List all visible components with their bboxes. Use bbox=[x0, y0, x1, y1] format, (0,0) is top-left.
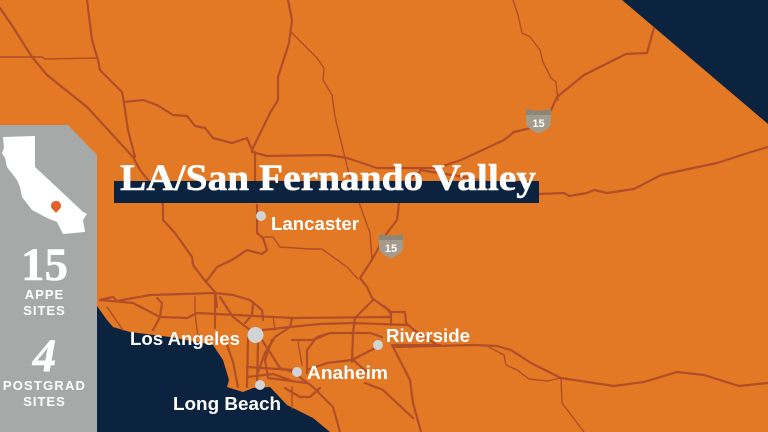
stat: 15 appe sites bbox=[21, 239, 68, 318]
side panel bbox=[0, 125, 97, 432]
city: riverside bbox=[373, 326, 470, 350]
title bar bbox=[114, 181, 539, 203]
city: riverside: Riverside bbox=[386, 326, 470, 346]
stat: 15 appe sites: SITES bbox=[23, 303, 66, 318]
stat: 15 appe sites: APPE bbox=[25, 287, 64, 302]
interstate shield: north bbox=[526, 109, 551, 134]
ocean: pacific coast bbox=[97, 306, 330, 432]
icon: california outline bbox=[2, 136, 87, 234]
stat: 4 postgrad sites: SITES bbox=[23, 394, 66, 409]
interstate shield: south bbox=[379, 234, 403, 258]
panel background bbox=[0, 125, 97, 432]
interstate shield: south: 15 bbox=[385, 243, 397, 255]
ocean: northeast corner bbox=[622, 0, 768, 124]
city: lancaster: Lancaster bbox=[271, 214, 359, 234]
city: anaheim: Anaheim bbox=[307, 363, 388, 383]
stat: 4 postgrad sites: 4 bbox=[32, 330, 56, 382]
stat: 15 appe sites: 15 bbox=[21, 239, 68, 291]
city: los angeles: Los Angeles bbox=[130, 329, 240, 349]
stat: 4 postgrad sites: POSTGRAD bbox=[3, 378, 86, 393]
city: long beach bbox=[173, 380, 281, 414]
title text: LA/San Fernando Valley bbox=[120, 158, 537, 199]
city: long beach: Long Beach bbox=[173, 394, 281, 414]
interstate shield: north: 15 bbox=[532, 118, 545, 130]
stat: 4 postgrad sites bbox=[3, 330, 86, 409]
title banner bbox=[114, 158, 539, 203]
icon: location pin bbox=[51, 201, 61, 213]
